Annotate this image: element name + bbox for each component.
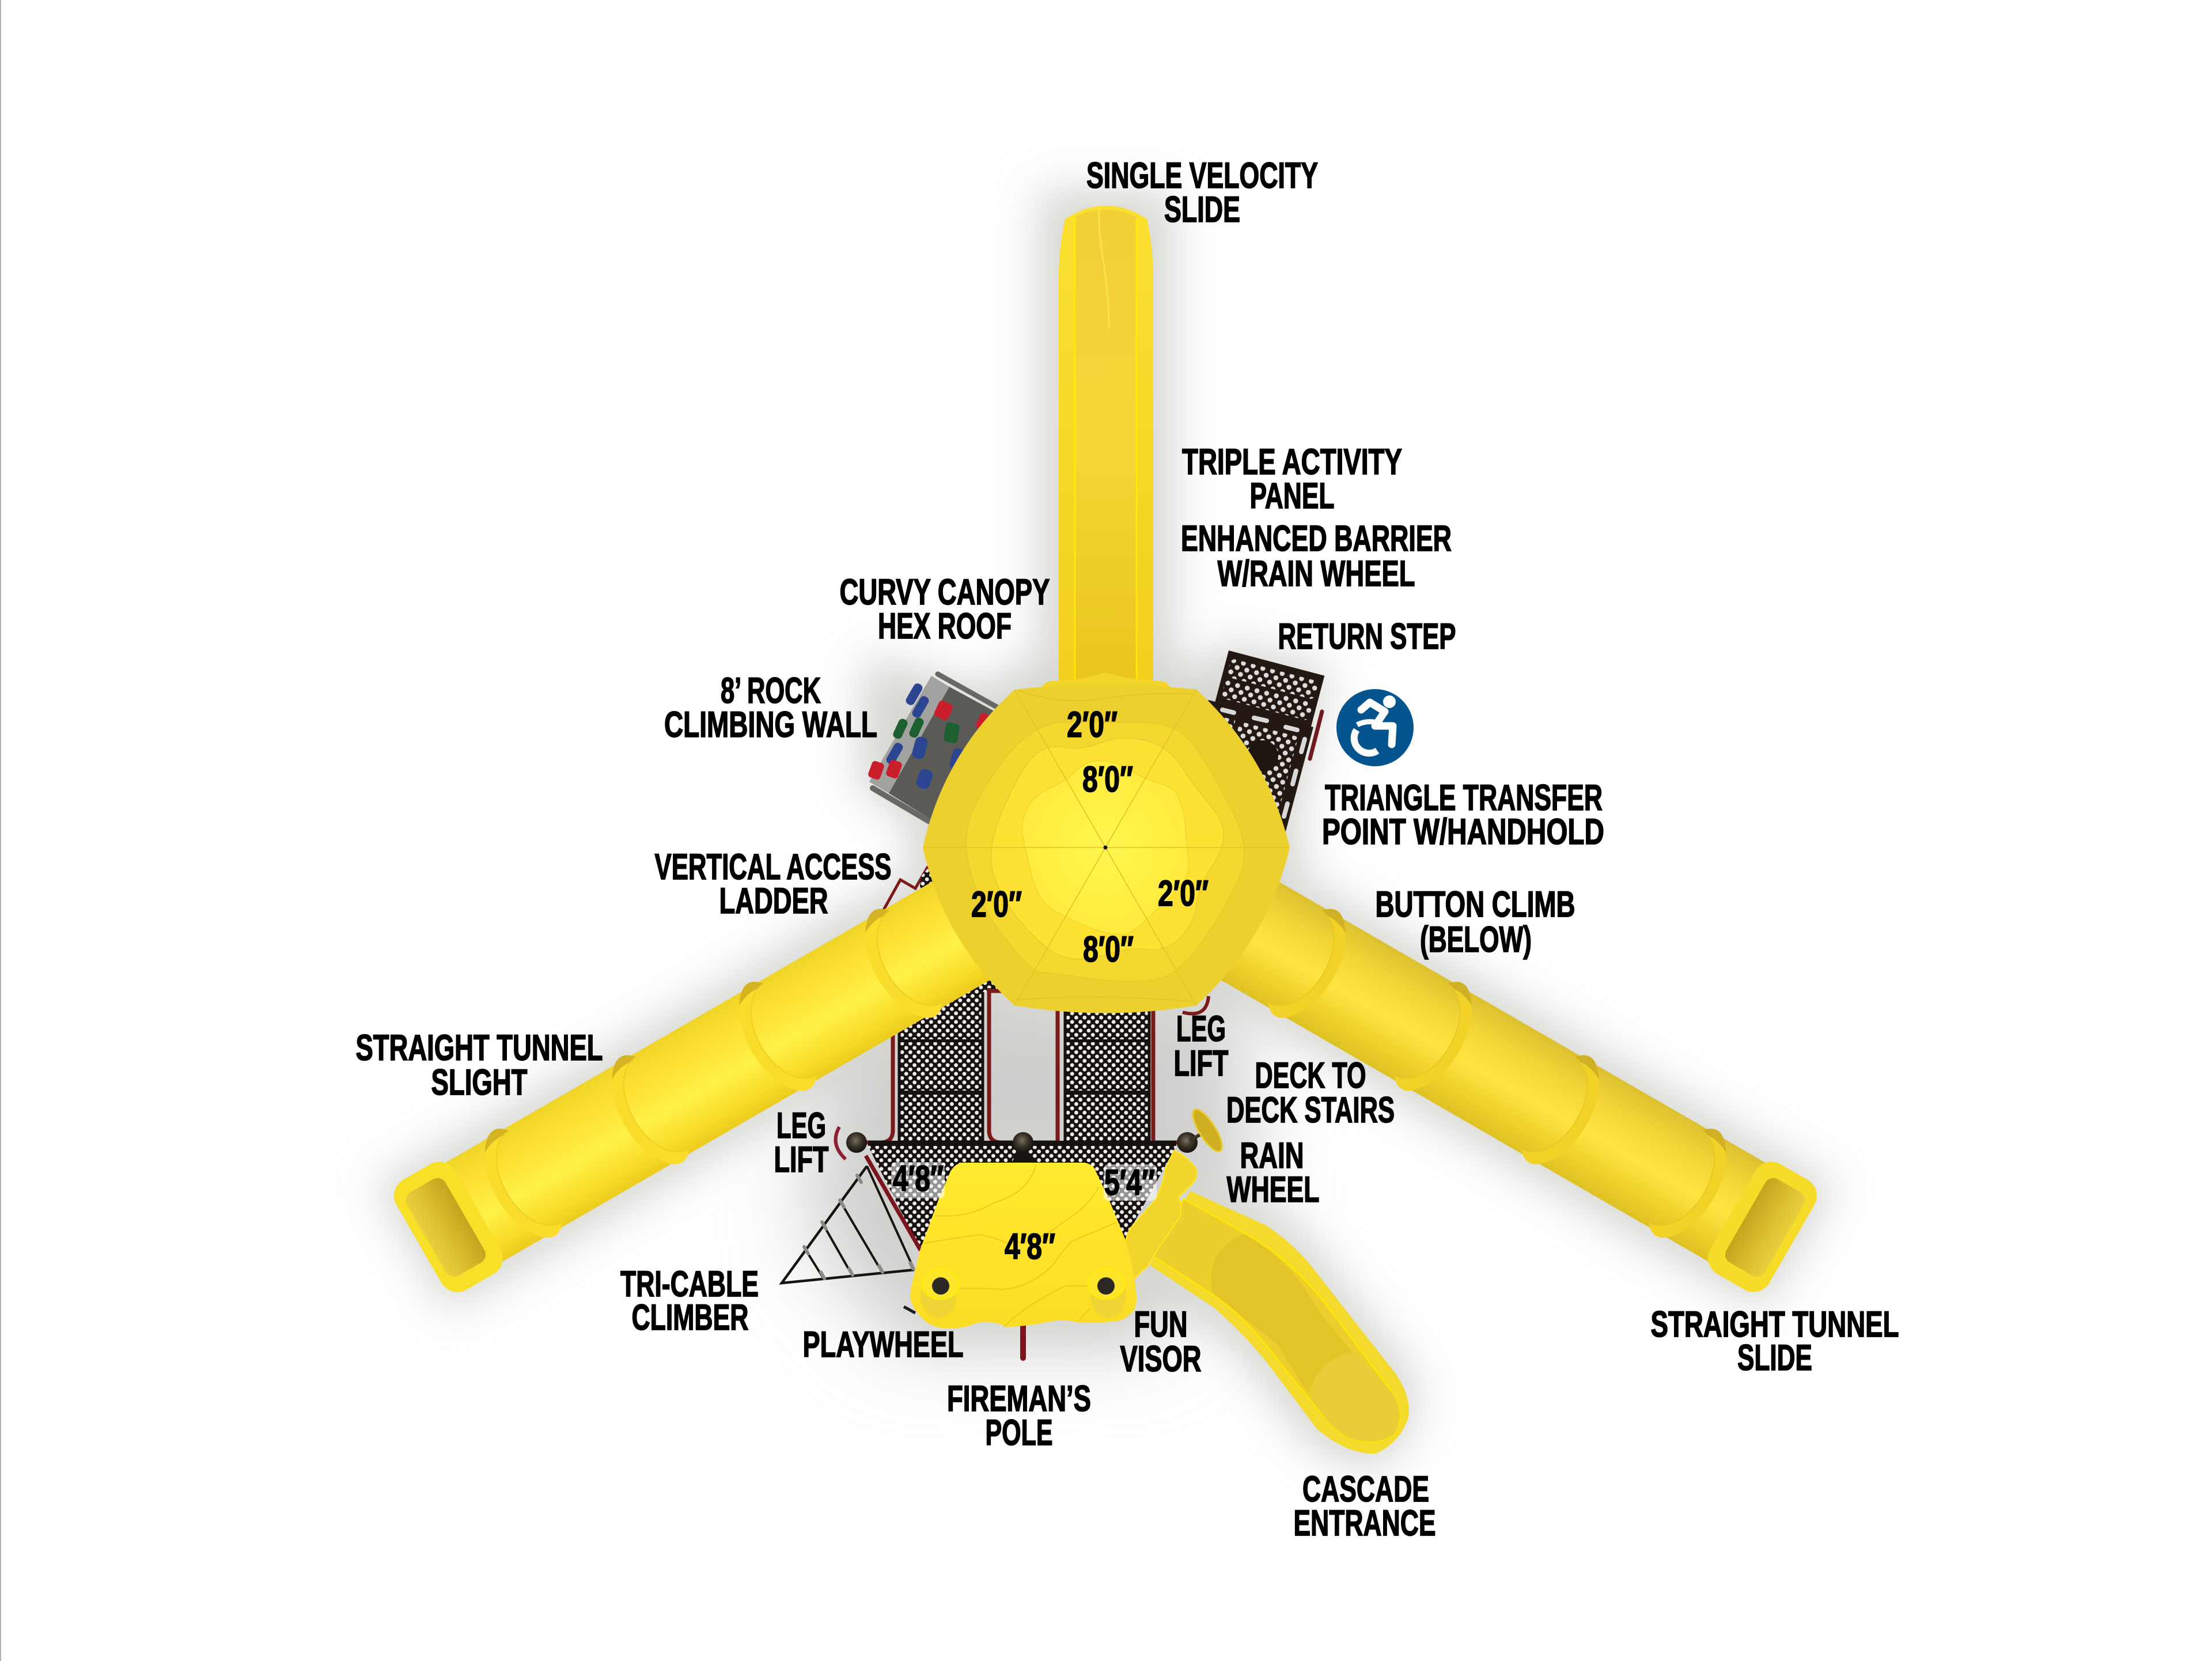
label: triple activity panel: [1182, 442, 1402, 516]
label: vertical access ladder: LADDER: [719, 881, 828, 921]
page edge line: [0, 0, 1, 1661]
return step panel: [1215, 650, 1324, 727]
label: button climb: (BELOW): [1420, 920, 1532, 960]
label: fun visor: VISOR: [1120, 1339, 1202, 1379]
deck heights: 4′8″: [893, 1159, 944, 1199]
visor knob: right: [1088, 1269, 1126, 1318]
label: leg lift upper: [1174, 1009, 1228, 1084]
label: button climb: BUTTON CLIMB: [1376, 884, 1575, 925]
tunnel mouth: [387, 1155, 510, 1299]
single velocity slide: [1059, 206, 1153, 691]
slide entrance hood: [1126, 1151, 1197, 1280]
fireman's pole: [1020, 1325, 1026, 1358]
label: tri-cable climber: CLIMBER: [631, 1297, 749, 1338]
roof ridges: [924, 690, 1289, 1005]
roof centre point: [1104, 846, 1107, 849]
deck heights: 8′0″: [1082, 759, 1133, 800]
label: fireman's pole: [947, 1379, 1091, 1453]
label: leg lift left: LEG: [777, 1106, 826, 1146]
label: fun visor: [1120, 1304, 1202, 1379]
label: fun visor: FUN: [1134, 1304, 1188, 1345]
label: tri-cable climber: TRI-CABLE: [620, 1264, 759, 1304]
label: triangle transfer point: POINT W/HANDHOLD: [1322, 812, 1604, 852]
label: rain wheel: WHEEL: [1227, 1170, 1319, 1210]
label: leg lift upper: LEG: [1176, 1009, 1226, 1049]
label: button climb: [1376, 884, 1575, 960]
label: fireman's pole: POLE: [985, 1413, 1053, 1453]
height label backings: [891, 1162, 1157, 1201]
leg lift: upper right: [1183, 996, 1209, 1013]
label: curvy canopy hex roof: [840, 572, 1050, 646]
label: fireman's pole: FIREMAN’S: [947, 1379, 1091, 1419]
label: cascade entrance: ENTRANCE: [1294, 1503, 1435, 1543]
left tunnel slide: [387, 822, 1087, 1299]
label: rain wheel: [1227, 1136, 1319, 1210]
rock climbing wall: [868, 674, 998, 823]
label: deck to deck stairs: DECK STAIRS: [1226, 1090, 1395, 1130]
label: deck to deck stairs: [1226, 1055, 1395, 1130]
deck heights: 5′4″: [1104, 1163, 1155, 1203]
tunnel rings: [467, 902, 950, 1251]
label: rock climbing wall: CLIMBING WALL: [664, 705, 877, 745]
label: cascade entrance: CASCADE: [1302, 1469, 1429, 1509]
label: tri-cable climber: [620, 1264, 759, 1338]
label: single velocity slide: [1086, 156, 1318, 230]
label: deck to deck stairs: DECK TO: [1255, 1055, 1366, 1096]
label: leg lift left: [774, 1106, 828, 1180]
label: single velocity slide: SLIDE: [1164, 190, 1240, 230]
tunnel mouth: [1701, 1155, 1824, 1299]
deck heights: 8′0″: [1083, 929, 1134, 970]
label: triangle transfer point: [1322, 778, 1604, 852]
transfer point slots: [1222, 710, 1305, 816]
label: triple activity panel: TRIPLE ACTIVITY: [1182, 442, 1402, 482]
climbing holds: [868, 682, 993, 790]
label: leg lift left: LIFT: [774, 1140, 828, 1180]
vertical access ladder: [883, 858, 945, 911]
deck heights: 2′0″: [1067, 705, 1118, 745]
stair rails: [861, 988, 1181, 1142]
slide sections: [1211, 1234, 1400, 1441]
label: straight tunnel slight: SLIGHT: [431, 1062, 528, 1103]
right tunnel slide: [1124, 822, 1824, 1299]
label: return step: RETURN STEP: [1278, 616, 1456, 657]
roof middle ring: [991, 739, 1224, 959]
label: straight tunnel slide: [1651, 1304, 1899, 1378]
label: straight tunnel slight: STRAIGHT TUNNEL: [356, 1028, 603, 1068]
roof collar: [1043, 672, 1169, 694]
icon: accessibility: [1336, 689, 1414, 766]
wall rails: [873, 674, 998, 823]
label: rain wheel: RAIN: [1240, 1136, 1304, 1176]
deck to deck stairs: [861, 974, 1181, 1142]
label: curvy canopy hex roof: CURVY CANOPY: [840, 572, 1050, 612]
wall panel: [869, 676, 995, 820]
deck heights: 2′0″: [1158, 873, 1209, 914]
tri-cable climber: [782, 1166, 914, 1283]
deck heights: 2′0″: [971, 884, 1022, 925]
curvy canopy hex roof: [923, 672, 1290, 1013]
cable clamps: [804, 1175, 913, 1278]
label: vertical access ladder: [654, 847, 892, 921]
label: cascade entrance: [1294, 1469, 1435, 1543]
cascade entrance slide: [1150, 1191, 1409, 1454]
label: leg lift upper: LIFT: [1174, 1043, 1228, 1084]
label: rock climbing wall: 8’ ROCK: [721, 671, 821, 711]
label: straight tunnel slide: SLIDE: [1737, 1338, 1812, 1378]
label: straight tunnel slight: [356, 1028, 603, 1103]
label: rock climbing wall: [664, 671, 877, 745]
deck heights: 4′8″: [1005, 1227, 1055, 1267]
post: right: [1177, 1132, 1198, 1153]
triangular deck: [866, 1141, 1176, 1267]
triangle transfer point: [1180, 700, 1313, 838]
label: single velocity slide: SINGLE VELOCITY: [1086, 156, 1318, 196]
left stair panel: [899, 974, 1001, 1142]
label: playwheel: PLAYWHEEL: [803, 1325, 963, 1365]
return step and transfer point: [1180, 650, 1324, 838]
label: enhanced barrier: ENHANCED BARRIER: [1181, 519, 1452, 559]
rain wheel: [1188, 1106, 1227, 1155]
ground shadows: [376, 190, 1835, 1466]
post: centre: [1013, 1132, 1033, 1153]
label: straight tunnel slide: STRAIGHT TUNNEL: [1651, 1304, 1899, 1345]
post and leg lift: left: [836, 1127, 867, 1159]
playwheel: [904, 1307, 915, 1313]
canopy contours: [923, 1166, 1116, 1327]
fun visor canopy: [910, 1163, 1137, 1329]
visor knob: left: [921, 1269, 959, 1318]
label: curvy canopy hex roof: HEX ROOF: [878, 606, 1012, 646]
label: triangle transfer point: TRIANGLE TRANSFER: [1325, 778, 1603, 818]
roof centre: [1022, 760, 1189, 934]
handhold: [1310, 712, 1322, 759]
roof outer shell: [923, 684, 1290, 1013]
roof contour ring: [966, 722, 1244, 982]
label: enhanced barrier: W/RAIN WHEEL: [1218, 554, 1415, 594]
deck heights: [893, 705, 1209, 1267]
tunnel rings: [1261, 902, 1744, 1251]
label: triple activity panel: PANEL: [1250, 476, 1334, 516]
right stair panel: [1064, 1008, 1149, 1142]
label: vertical access ladder: VERTICAL ACCESS: [654, 847, 892, 887]
label: enhanced barrier: [1181, 519, 1452, 594]
